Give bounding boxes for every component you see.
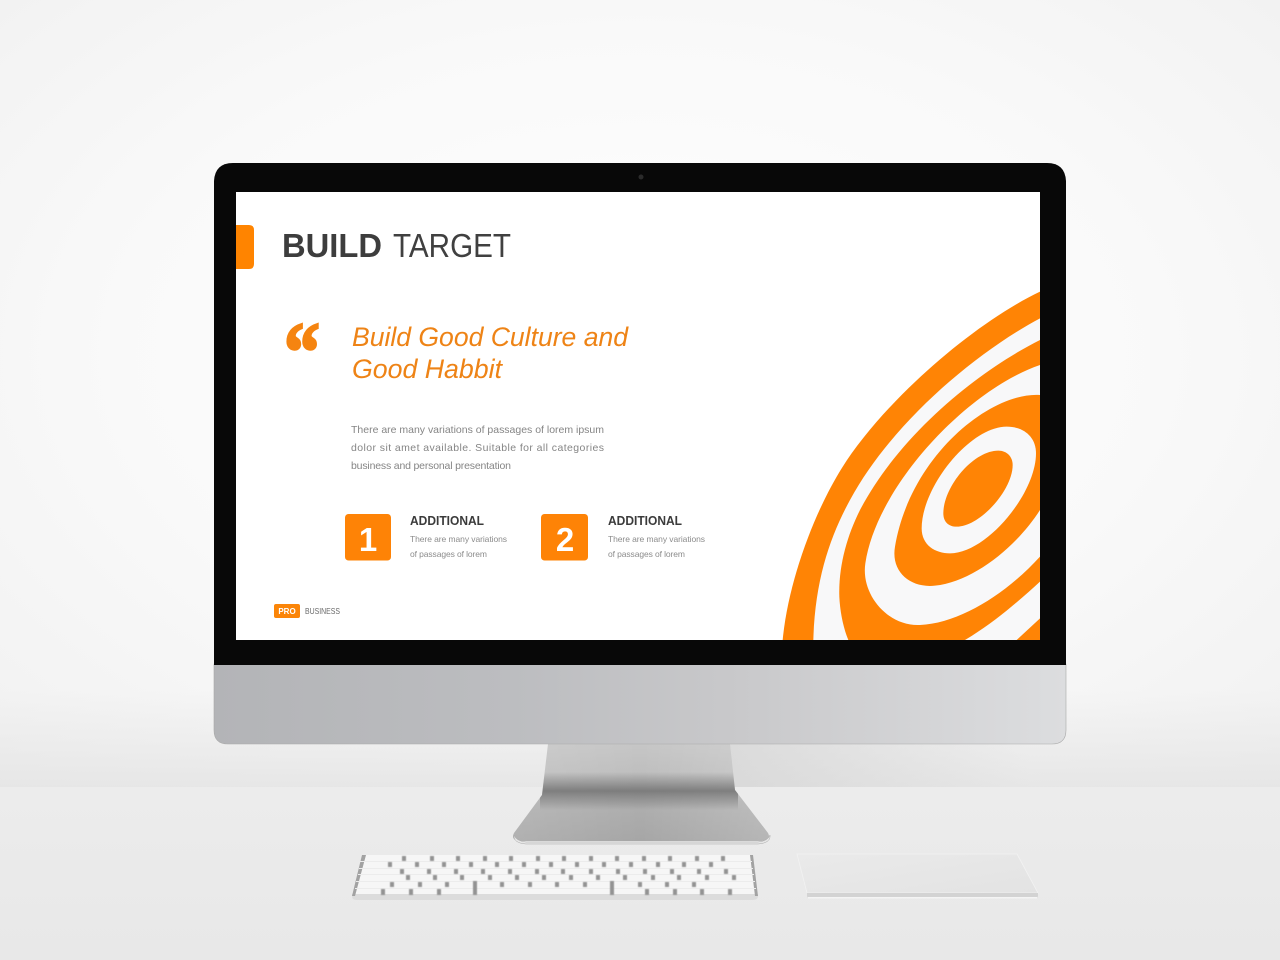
body paragraph: business and personal presentation (351, 460, 511, 472)
target graphic (783, 292, 1040, 640)
keyboard (352, 855, 758, 900)
footer brand: BUSINESS (305, 607, 340, 616)
title: TARGET (393, 227, 511, 264)
feature 1 text: ADDITIONAL (410, 514, 484, 528)
body paragraph: There are many variations of passages of lorem ipsum (351, 424, 604, 436)
feature 2 text: There are many variations (608, 534, 705, 544)
feature 2 text: ADDITIONAL (608, 514, 682, 528)
body paragraph (351, 424, 604, 472)
footer brand (274, 604, 340, 618)
feature item 1 (345, 514, 507, 560)
quote heading: Good Habbit (352, 354, 503, 384)
number badge 1: 1 (359, 521, 377, 558)
icon: webcam (638, 174, 644, 180)
body paragraph: dolor sit amet available. Suitable for all categories (351, 442, 604, 454)
feature 2 text: of passages of lorem (608, 549, 685, 559)
slide screen (236, 192, 1040, 640)
number badge 1 (345, 514, 391, 560)
quote heading: Build Good Culture and (352, 322, 629, 352)
monitor bezel (214, 163, 1066, 665)
number badge 2: 2 (556, 521, 574, 558)
icon: quotation mark: “ (284, 306, 320, 399)
title (284, 234, 510, 258)
footer brand: PRO (278, 607, 296, 616)
feature 1 text (410, 514, 507, 559)
feature item 2 (541, 514, 705, 560)
feature 1 text: of passages of lorem (410, 549, 487, 559)
monitor stand (513, 744, 770, 844)
feature 1 text: There are many variations (410, 534, 507, 544)
title accent tab (236, 225, 254, 269)
feature 2 text (608, 514, 705, 559)
monitor chin (214, 664, 1066, 744)
desk surface (0, 787, 1280, 960)
number badge 2 (541, 514, 588, 560)
quote heading (352, 326, 629, 378)
trackpad (797, 854, 1038, 898)
title: BUILD (282, 227, 382, 264)
